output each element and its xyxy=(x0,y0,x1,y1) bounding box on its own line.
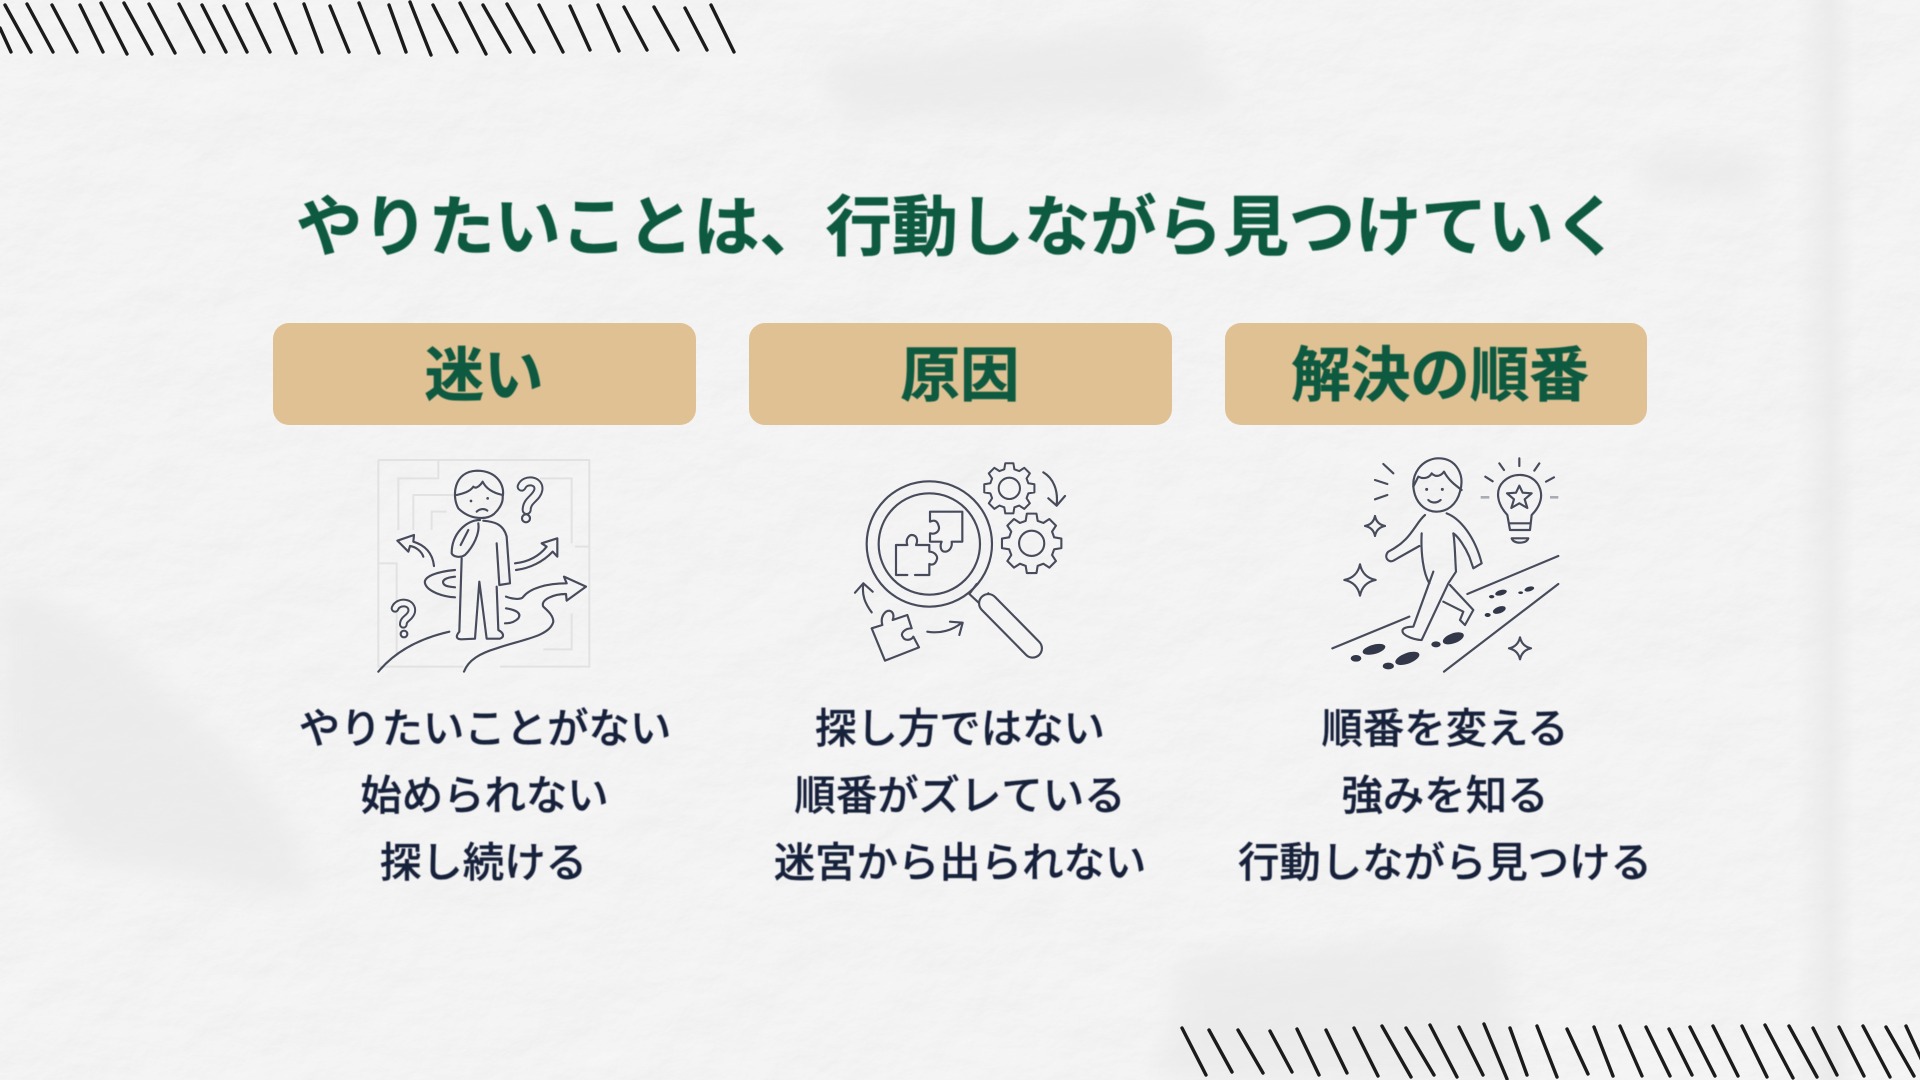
heading bar: 解決の順番: 解決の順番 xyxy=(1291,342,1589,409)
heading bar: 原因 xyxy=(749,323,1172,425)
list: 迷い: やりたいことがない xyxy=(299,706,671,752)
list: 迷い xyxy=(299,706,671,886)
icon: person walking toward a light bulb xyxy=(1332,458,1558,672)
list: 迷い: 始められない xyxy=(360,773,609,819)
list: 解決の順番: 順番を変える xyxy=(1321,706,1569,752)
list: 原因: 迷宮から出られない xyxy=(774,840,1146,886)
panel: 迷い xyxy=(273,323,696,886)
icon: magnifier, puzzle pieces and gears xyxy=(855,463,1065,661)
heading bar: 解決の順番 xyxy=(1225,323,1647,425)
panel: 原因 xyxy=(749,323,1172,886)
list: 解決の順番: 強みを知る xyxy=(1342,773,1548,819)
decorative hatch: bottom right xyxy=(1182,1024,1920,1079)
list: 原因 xyxy=(774,706,1146,886)
list: 迷い: 探し続ける xyxy=(380,840,587,886)
list: 解決の順番: 行動しながら見つける xyxy=(1238,840,1652,886)
heading bar: 迷い: 迷い xyxy=(424,342,544,409)
decorative hatch: top left xyxy=(0,2,734,55)
heading bar: 迷い xyxy=(273,323,696,425)
list: 原因: 順番がズレている xyxy=(794,773,1126,819)
panel: 解決の順番 xyxy=(1225,323,1652,886)
heading bar: 原因: 原因 xyxy=(900,342,1020,409)
title: やりたいことは、行動しながら見つけていく xyxy=(296,191,1620,265)
list: 原因: 探し方ではない xyxy=(815,706,1105,752)
list: 解決の順番 xyxy=(1238,706,1652,886)
icon: person lost in a maze xyxy=(378,460,589,672)
